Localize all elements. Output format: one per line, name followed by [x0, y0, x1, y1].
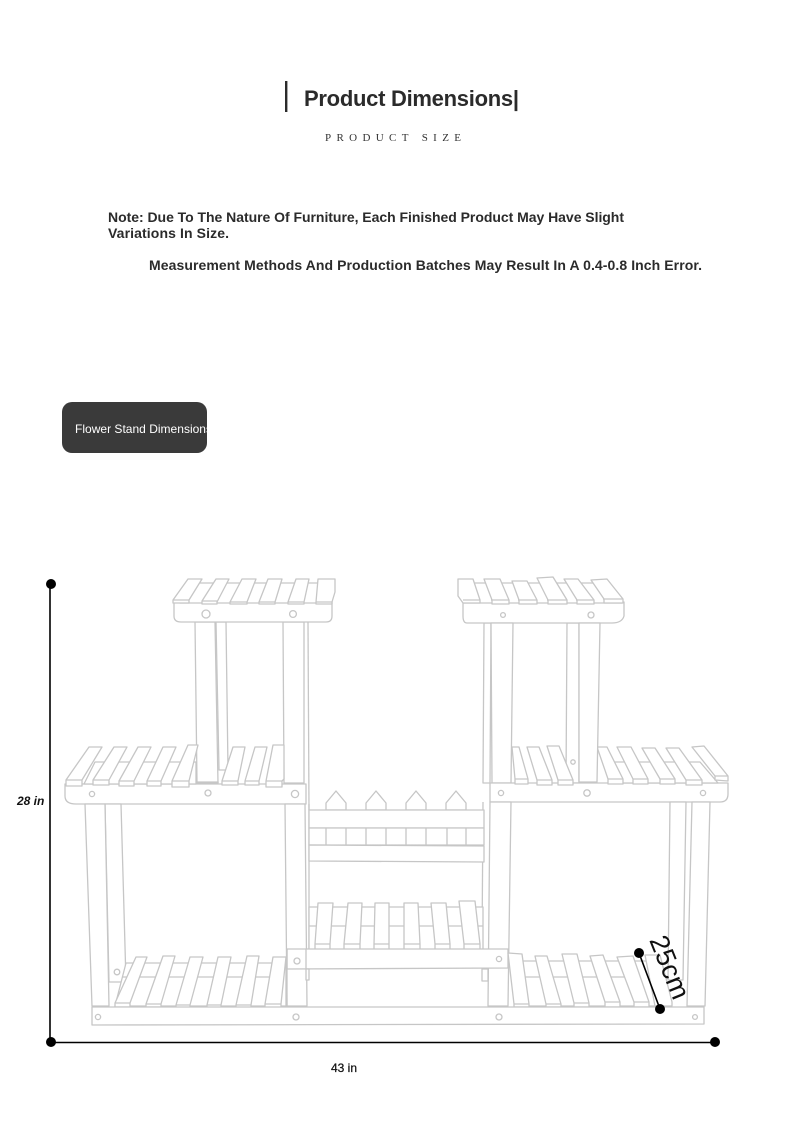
shelf: middle left [65, 745, 306, 804]
subtitle: product size: PRODUCT SIZE [325, 132, 461, 144]
leg: right inner column [491, 623, 513, 783]
legs: lower right [482, 802, 710, 1006]
tab button: Flower Stand Dimensions [62, 402, 212, 453]
height label: 28 in: 28 in [16, 794, 44, 808]
shelf: top right [458, 577, 624, 623]
note text block: Measurement Methods And Production Batches May Result In A 0.4-0.8 Inch Error. [149, 257, 702, 273]
width dimension line [46, 1037, 720, 1047]
base beam [92, 1007, 704, 1025]
width label: 43 in: 43 in [331, 1061, 357, 1075]
central lower shelf [287, 901, 508, 1006]
legs: upper right tier [483, 623, 579, 783]
lower right slats [508, 953, 672, 1007]
line drawing: flower stand [65, 577, 728, 1025]
note text block: Variations In Size. [108, 225, 229, 241]
legs: lower left [85, 804, 309, 1006]
tab button: Flower Stand Dimensions: Flower Stand Dimensions [75, 422, 212, 436]
height dimension line [46, 579, 56, 1042]
legs: upper left tier [195, 622, 309, 810]
depth label: 25cm: 25cm [643, 931, 696, 1003]
shelf: top left [173, 579, 335, 622]
note text block [108, 209, 702, 273]
note text block: Note: Due To The Nature Of Furniture, Each Finished Product May Have Slight [108, 209, 624, 225]
title: Product Dimensions: Product Dimensions| [304, 86, 519, 111]
depth dimension line [634, 948, 665, 1014]
shelf: middle right [490, 623, 728, 802]
central fence panel [309, 791, 484, 862]
lower left slats [115, 956, 286, 1008]
